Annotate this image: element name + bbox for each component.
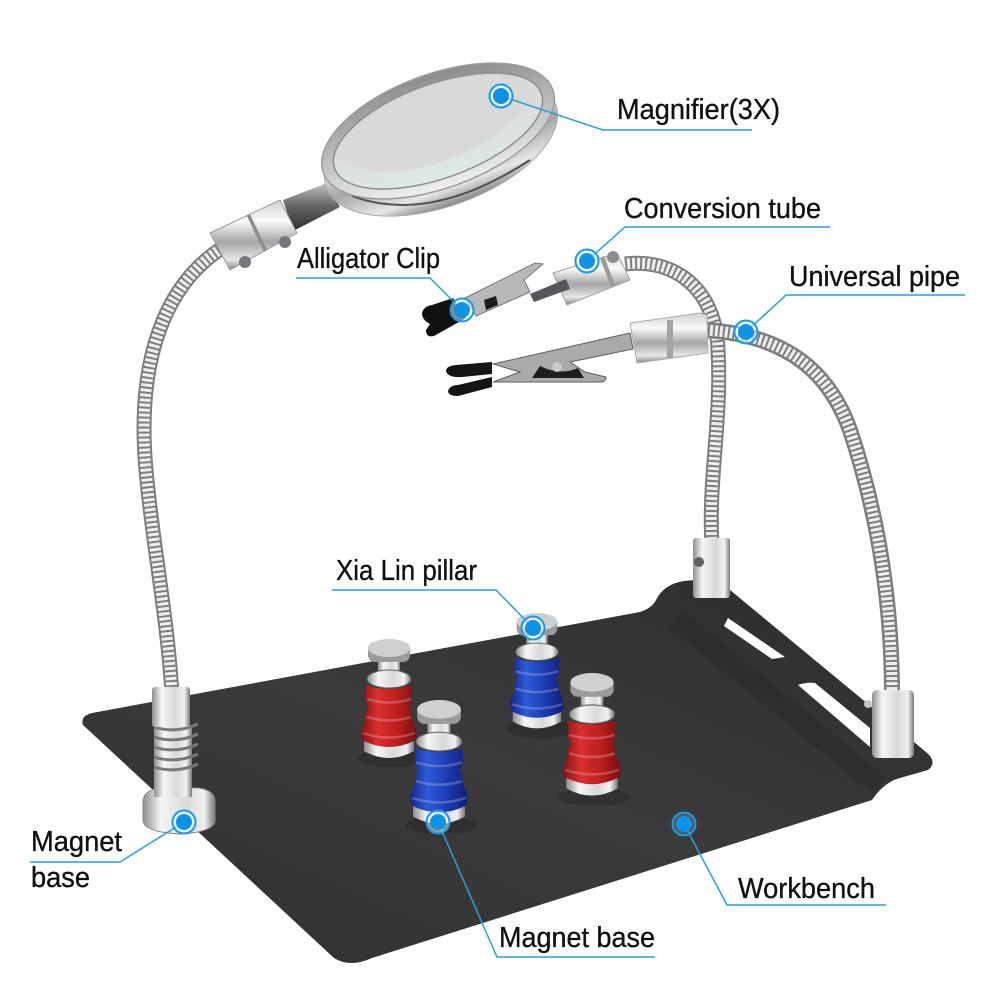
callout: Workbench: Workbench: [738, 873, 875, 905]
plate fold: [675, 618, 880, 786]
callout: Magnifier(3X): [490, 84, 780, 130]
right tube socket: [864, 690, 914, 758]
blue pillar front: [410, 700, 468, 824]
right gooseneck tube: [705, 330, 892, 695]
red pillar right: [564, 673, 620, 796]
magnifier handle: [283, 183, 340, 231]
callout: Xia Lin pillar: Xia Lin pillar: [336, 555, 477, 587]
magnifier: [283, 36, 576, 244]
lower alligator clip: [446, 333, 633, 396]
middle tube socket: [693, 538, 730, 598]
conversion tube: [553, 251, 630, 305]
callout: Magnifier(3X): Magnifier(3X): [617, 94, 780, 126]
callout: Conversion tube: [576, 193, 830, 272]
red pillar left: [361, 639, 417, 758]
callout: left Magnet base: [30, 810, 196, 894]
upper alligator clip: [422, 263, 570, 336]
left tube collar: [210, 200, 297, 270]
callout: Magnet base: Magnet base: [499, 922, 655, 954]
pillar shadows: [358, 720, 630, 834]
callout: Xia Lin pillar: [332, 555, 544, 640]
callout: left Magnet base: Magnet: [31, 826, 122, 858]
callout: Universal pipe: [734, 261, 965, 344]
middle gooseneck tube: [625, 263, 719, 545]
left base with spring: [143, 687, 215, 834]
callout: left Magnet base: base: [31, 862, 90, 894]
callout: Workbench: [672, 812, 886, 905]
slots in plate: [724, 618, 870, 747]
callout: Conversion tube: Conversion tube: [624, 193, 821, 225]
blue pillar rear: [510, 613, 564, 728]
callout: Alligator Clip: Alligator Clip: [297, 243, 440, 275]
lower clip collar: [630, 313, 708, 363]
workbench plate: [82, 580, 933, 963]
callout: Universal pipe: Universal pipe: [789, 261, 960, 293]
callout: Magnet base: [426, 810, 655, 957]
callout: Alligator Clip: [296, 243, 474, 322]
magnet foot: [143, 788, 215, 834]
left gooseneck tube: [144, 248, 222, 695]
